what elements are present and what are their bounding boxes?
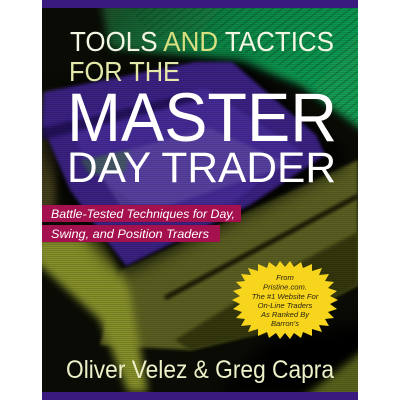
- title line: day trader: DAY TRADER: [67, 144, 336, 192]
- banner line one: [42, 205, 241, 222]
- purple trading screen: [42, 60, 345, 272]
- subtitle banner: [42, 205, 241, 242]
- green panel: [98, 8, 358, 134]
- book cover: [42, 0, 358, 400]
- title line: tools and tactics: TOOLS AND TACTICS: [70, 26, 334, 57]
- left olive edge: [42, 90, 60, 205]
- starburst callout: [232, 261, 338, 339]
- starburst text: On-Line Traders: [258, 301, 313, 310]
- starburst text: From: [276, 273, 294, 282]
- bottom purple band: [42, 392, 358, 400]
- starburst text: The #1 Website For: [252, 292, 319, 301]
- banner line two: [42, 225, 220, 242]
- olive lower field: [100, 160, 358, 350]
- starburst text: Barron's: [271, 319, 299, 328]
- subtitle text two: Swing, and Position Traders: [51, 229, 209, 241]
- title line: for the: FOR THE: [69, 56, 180, 87]
- starburst text: Pristine.com.: [263, 282, 307, 292]
- starburst shape: [232, 261, 338, 339]
- starburst text: As Ranked By: [260, 310, 310, 319]
- authors: Oliver Velez & Greg Capra: [66, 356, 334, 384]
- subtitle text one: Battle-Tested Techniques for Day,: [51, 209, 235, 221]
- scan lines: [42, 8, 358, 392]
- title line: master: MASTER: [67, 79, 337, 156]
- top purple band: [42, 0, 358, 8]
